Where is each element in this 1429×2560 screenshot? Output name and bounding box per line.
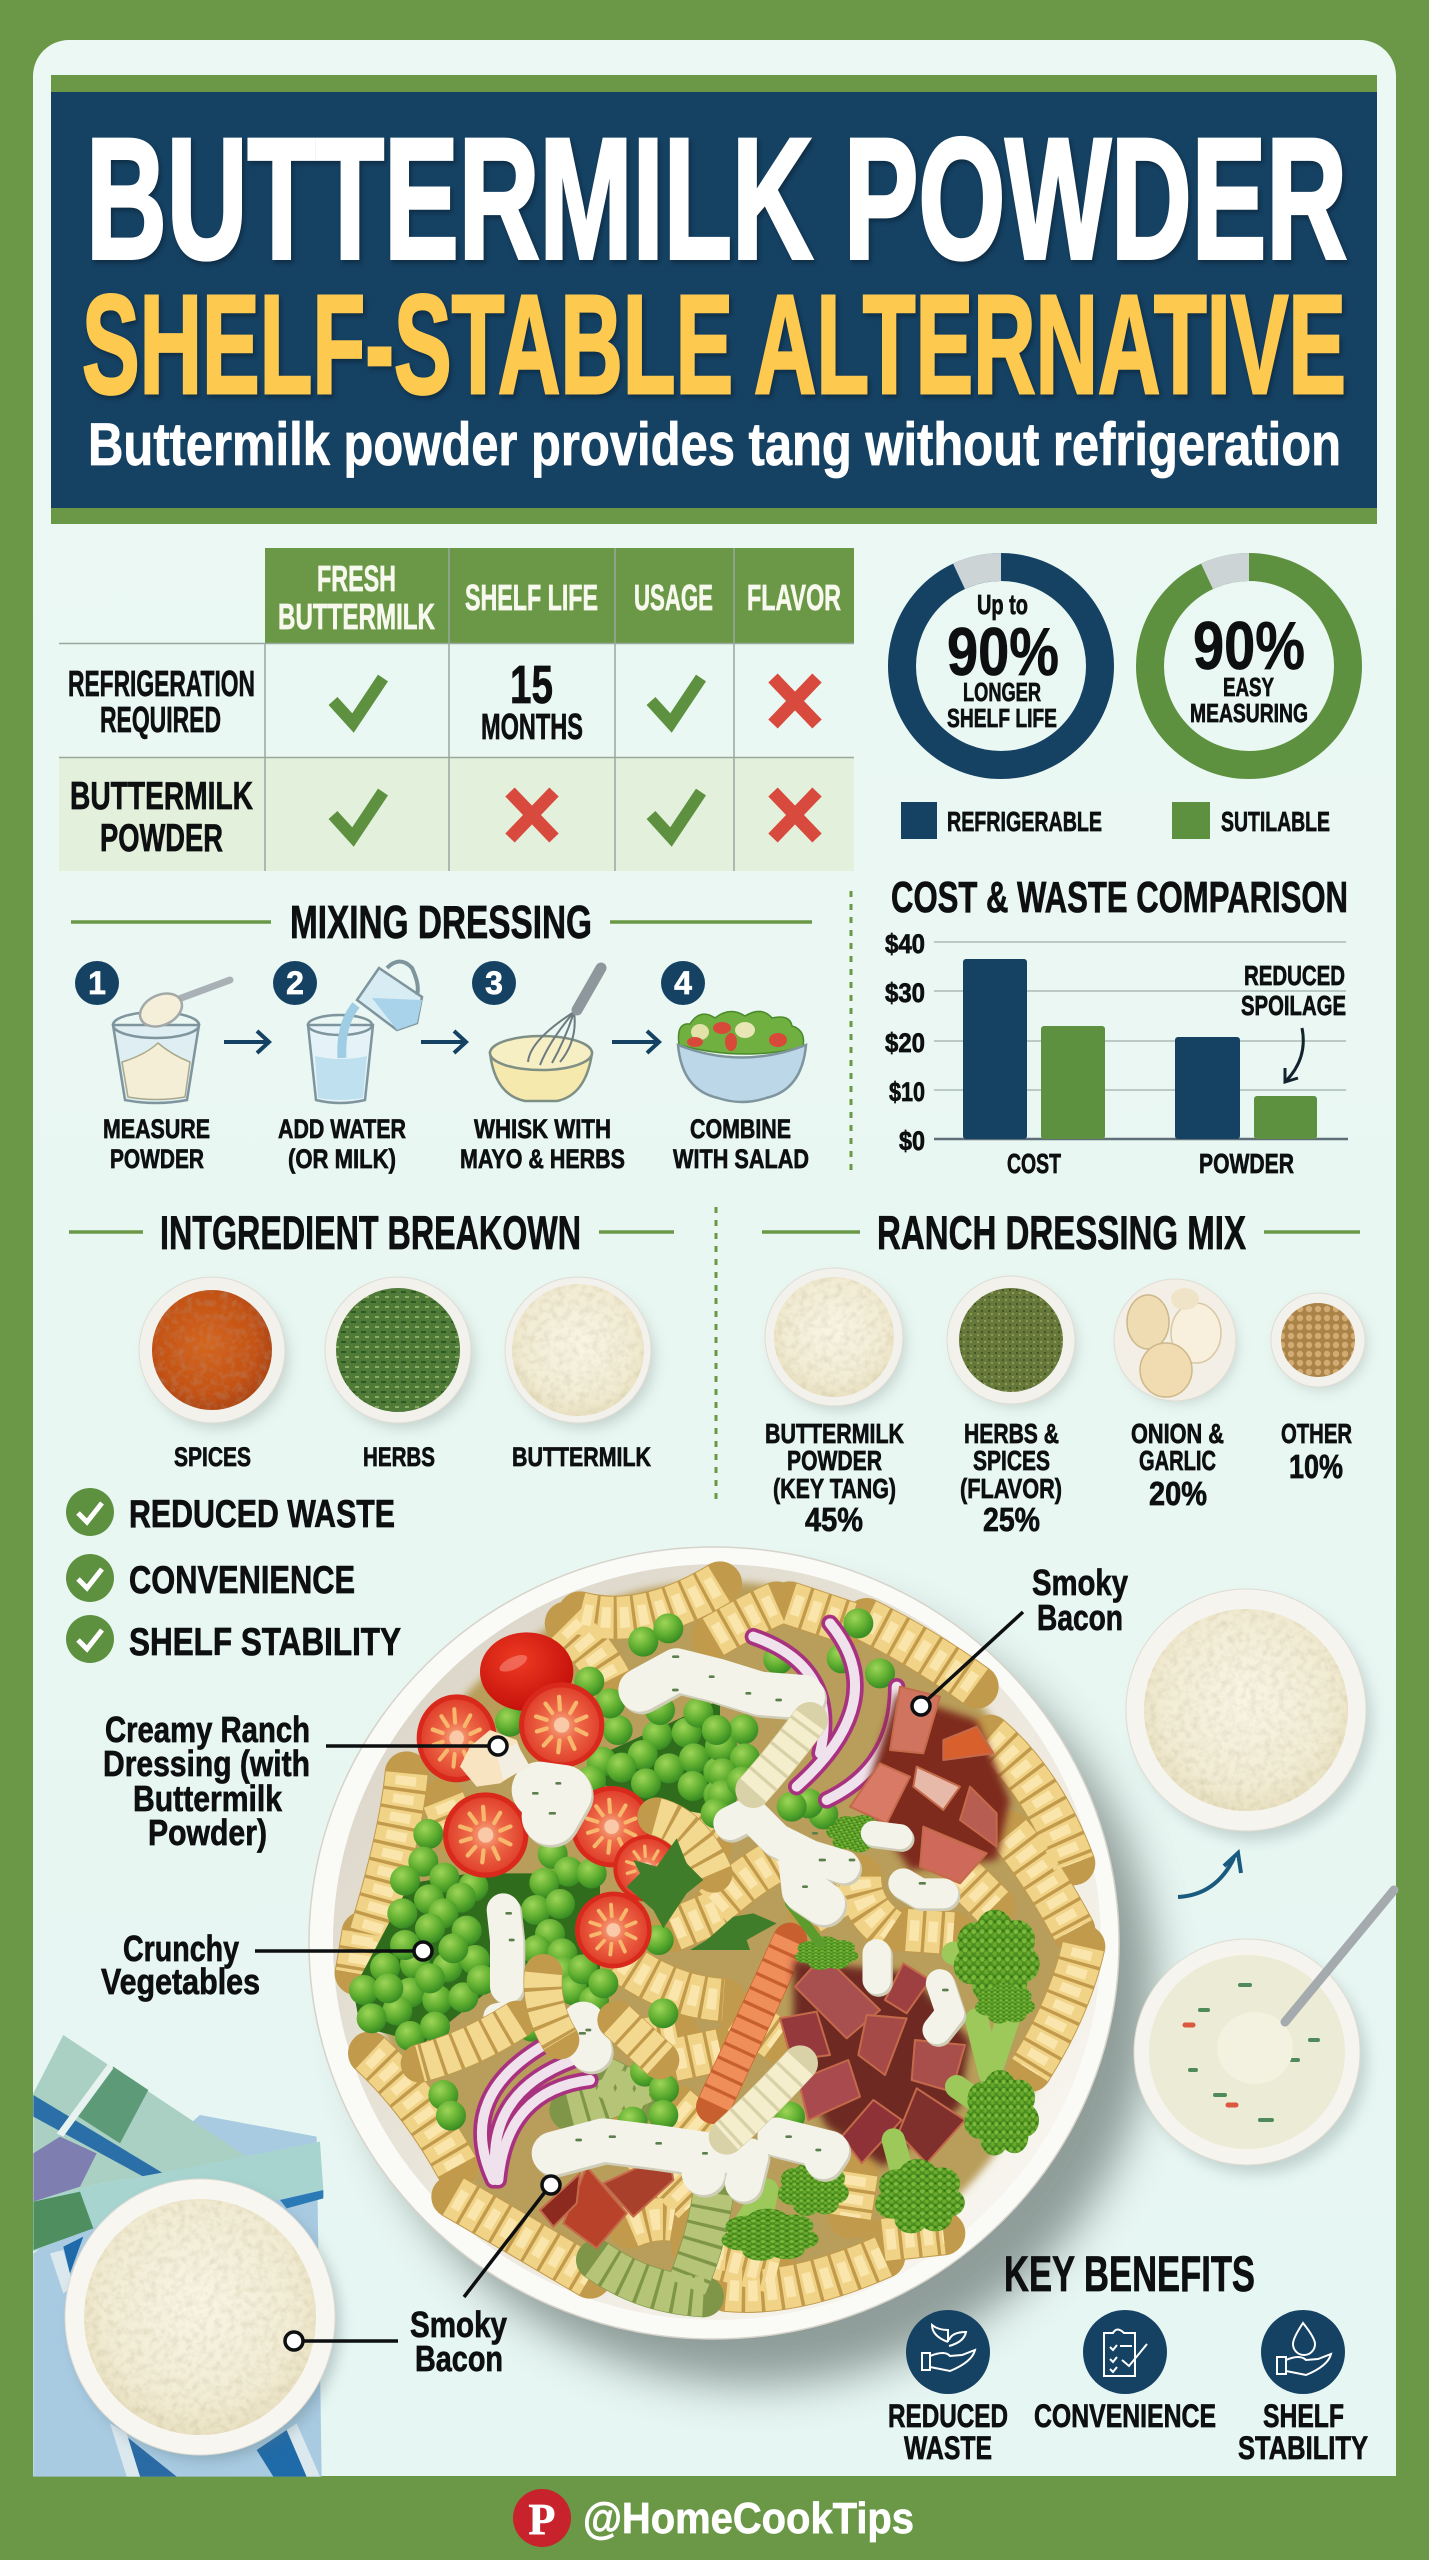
bowl: powder, right	[1126, 1589, 1372, 1840]
parsley	[627, 1838, 777, 1950]
bar chart: $20	[885, 1028, 925, 1058]
bar chart: $0	[899, 1126, 925, 1156]
curved arrow	[1178, 1853, 1241, 1897]
benefit: reduced waste: WASTE	[904, 2430, 992, 2466]
callout: creamy ranch dressing: Powder)	[148, 1812, 267, 1853]
bar chart: POWDER	[1199, 1148, 1294, 1179]
step 4: combine	[661, 961, 809, 1174]
benefit: reduced waste: REDUCED	[888, 2398, 1008, 2434]
bowl: herbs	[325, 1277, 474, 1428]
annotation: reduced spoilage: REDUCED	[1244, 960, 1345, 991]
bar chart	[885, 929, 1348, 1179]
arrow	[612, 1031, 659, 1053]
donut: up to 90% longer shelf life: SHELF LIFE	[947, 703, 1057, 733]
callout: smoky bacon bottom: Smoky	[410, 2304, 507, 2345]
donut: 90% easy measuring	[1150, 567, 1348, 765]
callout: creamy ranch dressing: Creamy Ranch	[105, 1709, 310, 1750]
row labels	[68, 663, 255, 860]
footer: pinterest handle	[513, 2489, 914, 2547]
table header labels	[278, 558, 841, 637]
table header labels: BUTTERMILK	[278, 596, 435, 637]
step 3: whisk: WHISK WITH	[474, 1114, 611, 1144]
step 1: measure powder: 1	[88, 965, 106, 1001]
step 4: combine: WITH SALAD	[673, 1144, 809, 1174]
donut legend: REFRIGERABLE	[947, 806, 1102, 837]
step 1: measure powder: POWDER	[110, 1144, 204, 1174]
step 4: combine: COMBINE	[690, 1114, 791, 1144]
labels: ranch mix: HERBS &	[964, 1418, 1059, 1449]
labels: breakdown bowls: SPICES	[174, 1442, 251, 1472]
bowl: buttermilk	[505, 1277, 654, 1428]
step 3: whisk	[460, 961, 625, 1174]
table header labels: FLAVOR	[747, 577, 841, 618]
check and cross marks	[333, 678, 817, 838]
labels: ranch mix: 25%	[983, 1501, 1040, 1538]
donut: up to 90% longer shelf life	[902, 567, 1100, 765]
big bowl shadow	[355, 1595, 1155, 2385]
bowl: ranch dressing with spoon	[1134, 1890, 1394, 2174]
labels: ranch mix: OTHER	[1281, 1418, 1352, 1449]
bowl: ranch buttermilk powder	[765, 1268, 905, 1410]
row labels: REFRIGERATION	[68, 663, 255, 704]
heading: mixing dressing: MIXING DRESSING	[290, 896, 592, 948]
callout: smoky bacon top: Bacon	[1037, 1597, 1123, 1638]
bowl: spices	[139, 1277, 288, 1428]
divider	[850, 891, 852, 1174]
peas	[349, 1608, 895, 2137]
labels: ranch mix: (KEY TANG)	[773, 1473, 896, 1504]
step 3: whisk: MAYO & HERBS	[460, 1144, 625, 1174]
step 2: add water: ADD WATER	[278, 1114, 406, 1144]
step 1: measure powder: MEASURE	[103, 1114, 210, 1144]
benefit: reduced waste	[888, 2310, 1008, 2466]
checklist	[66, 1488, 401, 1664]
callout: creamy ranch dressing	[103, 1709, 507, 1853]
labels: ranch mix: SPICES	[973, 1445, 1050, 1476]
callout: crunchy vegetables: Crunchy	[123, 1928, 239, 1969]
labels: breakdown bowls: BUTTERMILK	[512, 1442, 651, 1472]
heading: ranch dressing mix: RANCH DRESSING MIX	[877, 1206, 1246, 1259]
bowl: ranch herbs and spices	[947, 1276, 1076, 1406]
checklist: REDUCED WASTE	[129, 1493, 395, 1536]
step 2: add water: (OR MILK)	[288, 1144, 396, 1174]
callout: smoky bacon top	[912, 1562, 1128, 1715]
bar chart: $30	[885, 978, 925, 1008]
row labels: BUTTERMILK	[70, 775, 253, 818]
callout: crunchy vegetables: Vegetables	[101, 1961, 260, 2002]
arrow	[224, 1031, 269, 1053]
benefit: shelf stability: SHELF	[1263, 2398, 1344, 2434]
top pasta pieces	[420, 1720, 810, 2137]
labels: ranch mix	[765, 1418, 1352, 1538]
checklist: CONVENIENCE	[129, 1559, 355, 1602]
table header labels: USAGE	[634, 577, 713, 618]
annotation: reduced spoilage	[1241, 960, 1346, 1082]
donut: up to 90% longer shelf life: Up to	[977, 589, 1028, 620]
callout line: powder bowl	[285, 2332, 398, 2350]
heading: ingredient breakdown: INTGREDIENT BREAKOWN	[160, 1206, 581, 1259]
napkin	[33, 2035, 323, 2477]
labels: ranch mix: 20%	[1149, 1475, 1207, 1512]
labels: ranch mix: 10%	[1289, 1448, 1343, 1485]
red onions	[482, 1623, 897, 2180]
row labels: REQUIRED	[100, 699, 221, 740]
15 months: MONTHS	[481, 706, 583, 747]
donut: 90% easy measuring: MEASURING	[1190, 698, 1308, 728]
donut: 90% easy measuring: EASY	[1223, 672, 1274, 702]
benefit: shelf stability	[1238, 2310, 1368, 2466]
ranch dressing	[460, 1657, 952, 2186]
bar chart: $10	[889, 1077, 925, 1107]
step 4: combine: 4	[674, 965, 692, 1001]
tomatoes	[417, 1632, 680, 1968]
divider	[714, 1207, 718, 1503]
donut: up to 90% longer shelf life: LONGER	[963, 677, 1041, 707]
footer: pinterest handle: @HomeCookTips	[583, 2494, 914, 2543]
annotation: reduced spoilage: SPOILAGE	[1241, 990, 1346, 1021]
labels: ranch mix: (FLAVOR)	[960, 1473, 1062, 1504]
step 2: add water: 2	[286, 965, 304, 1001]
bowl: onion and garlic	[1114, 1279, 1236, 1402]
callout: smoky bacon bottom	[410, 2176, 560, 2379]
footer: pinterest handle: P	[529, 2495, 555, 2544]
callout: smoky bacon bottom: Bacon	[415, 2338, 503, 2379]
labels: breakdown bowls: HERBS	[363, 1442, 435, 1472]
bar chart: $40	[885, 929, 925, 959]
checklist: SHELF STABILITY	[129, 1621, 401, 1664]
labels: ranch mix: 45%	[805, 1501, 863, 1538]
callout: smoky bacon top: Smoky	[1032, 1562, 1128, 1603]
15 months	[481, 655, 583, 747]
donut legend: SUTILABLE	[1221, 806, 1330, 837]
step 2: add water	[273, 961, 422, 1174]
15 months: 15	[510, 655, 553, 715]
bowl: buttermilk powder on napkin	[65, 2179, 340, 2460]
benefit: convenience: CONVENIENCE	[1034, 2398, 1216, 2434]
labels: ranch mix: POWDER	[787, 1445, 882, 1476]
pea beds	[353, 1700, 720, 2043]
labels: ranch mix: GARLIC	[1139, 1445, 1216, 1476]
callout: creamy ranch dressing: Dressing (with	[103, 1743, 310, 1784]
title banner	[51, 75, 1377, 524]
heading: key benefits: KEY BENEFITS	[1004, 2246, 1255, 2302]
arrow	[421, 1031, 466, 1053]
broccoli	[721, 1808, 1040, 2261]
labels: ranch mix: BUTTERMILK	[765, 1418, 904, 1449]
benefit: shelf stability: STABILITY	[1238, 2430, 1368, 2466]
table header labels: FRESH	[317, 558, 396, 599]
donut: up to 90% longer shelf life: 90%	[947, 614, 1059, 690]
benefit: convenience	[1034, 2310, 1216, 2434]
labels: breakdown bowls	[174, 1442, 651, 1472]
bacon	[540, 1687, 1010, 2248]
bowl: other seeds	[1271, 1293, 1366, 1389]
table header labels: SHELF LIFE	[465, 577, 598, 618]
step 1: measure powder	[75, 961, 230, 1174]
fusilli pasta	[357, 1583, 1083, 2297]
comparison table	[59, 548, 854, 871]
big bowl of pasta salad	[309, 1547, 1119, 2339]
donut: 90% easy measuring: 90%	[1193, 608, 1305, 684]
callout: creamy ranch dressing: Buttermilk	[133, 1778, 283, 1819]
bar chart: COST	[1007, 1148, 1061, 1179]
row labels: POWDER	[100, 817, 223, 860]
step 3: whisk: 3	[485, 965, 503, 1001]
callout: crunchy vegetables	[101, 1928, 432, 2002]
labels: ranch mix: ONION &	[1131, 1418, 1224, 1449]
donut legend	[901, 802, 1330, 839]
